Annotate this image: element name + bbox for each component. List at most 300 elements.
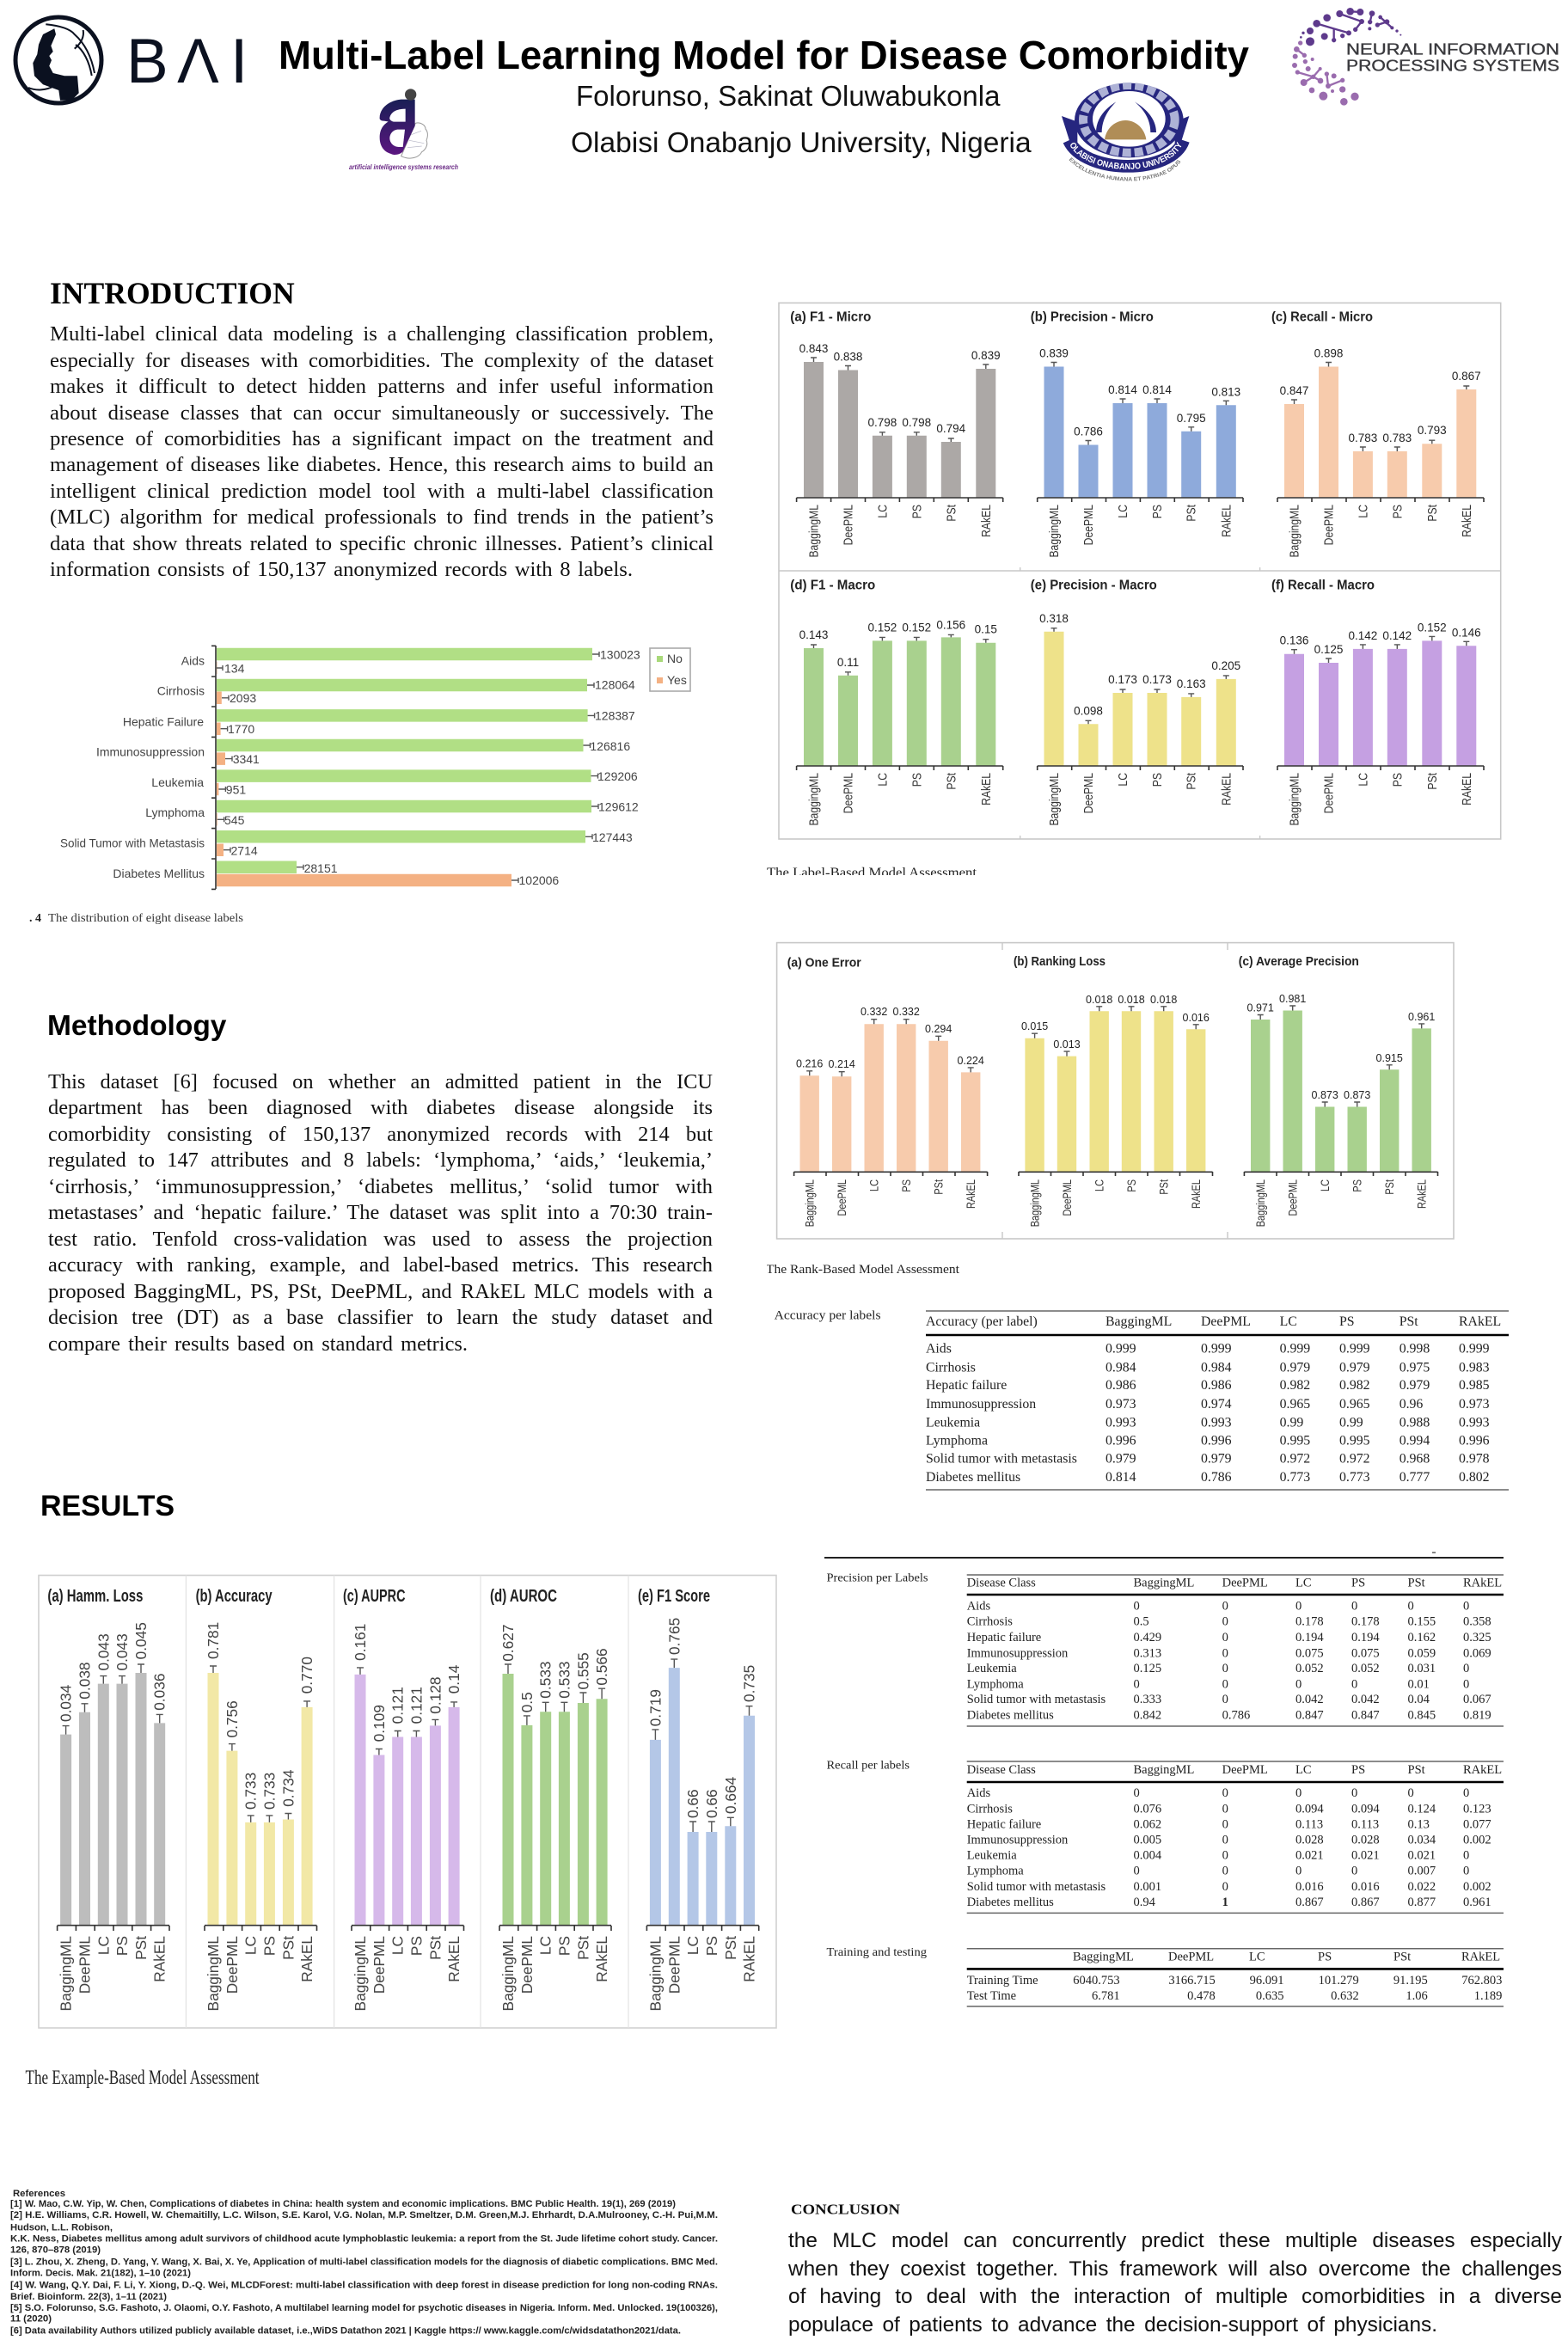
table: precision per labels: 0.5 [1133, 1614, 1149, 1628]
text: conclusion paragraph [788, 2229, 1562, 2337]
table: training and testing: LC [1249, 1951, 1265, 1964]
chart: distribution of eight disease labels: 102006 [519, 873, 559, 887]
table: recall per labels: LC [1295, 1763, 1312, 1777]
chart: F1 micro: (a) F1 - Micro [790, 309, 871, 325]
table: precision per labels: 0.075 [1351, 1647, 1380, 1661]
chart: one error: 0.216 [796, 1057, 823, 1069]
chart: F1 score: PS [703, 1936, 720, 1956]
table: precision per labels: 0.325 [1463, 1631, 1491, 1645]
chart: ranking loss: 0.018 [1086, 994, 1112, 1006]
table: recall per labels: Solid tumor with metastasis [967, 1880, 1106, 1894]
chart: ranking loss: (b) Ranking Loss [1014, 955, 1106, 969]
author name: Folorunso, Sakinat Oluwabukonla [576, 80, 1000, 112]
table: precision per labels: 0.786 [1222, 1708, 1250, 1722]
table: recall per labels: 0 [1295, 1786, 1302, 1800]
chart: ranking loss: 0.013 [1053, 1038, 1081, 1050]
table: training and testing: 0.635 [1256, 1989, 1284, 2003]
table: recall per labels: 0 [1222, 1834, 1228, 1847]
chart: distribution of eight disease labels: 129206 [597, 769, 638, 783]
table: precision per labels: 0.358 [1463, 1614, 1491, 1628]
table: recall per labels: 0.13 [1408, 1817, 1430, 1831]
chart: distribution of eight disease labels [60, 645, 691, 891]
table: precision per labels: 0.845 [1408, 1708, 1436, 1722]
table: recall per labels: 0 [1133, 1786, 1140, 1800]
chart: AUPRC: 0.109 [371, 1705, 388, 1742]
chart: recall macro: RAkEL [1460, 773, 1473, 805]
table: recall per labels: 0 [1351, 1786, 1357, 1800]
chart: F1 micro: 0.798 [902, 416, 931, 429]
chart: average precision: 0.981 [1279, 993, 1306, 1005]
text: introduction paragraph: intelligent clinical prediction model tool with a multi-label classification [50, 480, 714, 503]
chart: ranking loss: RAkEL [1190, 1179, 1204, 1209]
chart: recall micro: 0.867 [1452, 370, 1481, 383]
table: accuracy per labels: Diabetes mellitus [926, 1470, 1020, 1485]
table: recall per labels: 0.002 [1463, 1834, 1491, 1847]
table: recall per labels: 0.076 [1133, 1802, 1161, 1816]
table: accuracy per labels: 0.996 [1459, 1433, 1490, 1448]
chart: accuracy: PS [260, 1936, 278, 1956]
references: 11 (2020) [10, 2313, 52, 2324]
table: accuracy per labels [774, 1309, 1509, 1491]
chart: precision micro: PS [1150, 505, 1164, 518]
table: recall per labels: 0 [1222, 1880, 1228, 1894]
chart: distribution of eight disease labels: 128387 [595, 708, 635, 722]
chart: average precision: RAkEL [1415, 1179, 1429, 1209]
table: precision per labels: Aids [967, 1600, 990, 1614]
chart: average precision: 0.915 [1376, 1052, 1403, 1064]
table: accuracy per labels: RAkEL [1459, 1314, 1501, 1329]
chart: average precision [1239, 955, 1437, 1227]
table: training and testing: 1.189 [1474, 1989, 1502, 2003]
chart: F1 macro: DeePML [842, 773, 855, 813]
table: accuracy per labels: 0.999 [1339, 1341, 1370, 1357]
chart: AUROC: 0.533 [555, 1661, 573, 1699]
chart: ranking loss: 0.018 [1150, 994, 1177, 1006]
chart: one error [787, 956, 988, 1227]
table: accuracy per labels: 0.994 [1400, 1433, 1430, 1448]
table: precision per labels: 0 [1222, 1662, 1228, 1675]
table: precision per labels: Lymphoma [967, 1677, 1024, 1691]
chart: F1 score: 0.735 [741, 1665, 758, 1702]
table: accuracy per labels: 0.993 [1459, 1415, 1490, 1430]
table: precision per labels: 0 [1463, 1662, 1469, 1675]
chart: distribution of eight disease labels: 2093 [230, 691, 256, 705]
table: accuracy per labels: 0.982 [1280, 1378, 1310, 1393]
chart: F1 score: (e) F1 Score [638, 1587, 710, 1606]
chart: ranking loss: BaggingML [1028, 1179, 1042, 1227]
table: precision per labels: 0.042 [1295, 1693, 1324, 1706]
chart: F1 macro: LC [875, 773, 890, 787]
table: accuracy per labels: 0.99 [1280, 1415, 1303, 1430]
table: recall per labels: 0.113 [1295, 1817, 1323, 1831]
chart: F1 score: 0.765 [665, 1618, 683, 1655]
chart: precision micro: 0.839 [1039, 347, 1069, 359]
chart: one error: 0.224 [958, 1055, 984, 1067]
chart: distribution of eight disease labels: 545 [224, 813, 245, 827]
chart: accuracy: 0.734 [279, 1769, 297, 1807]
chart: precision micro: PSt [1185, 505, 1198, 522]
table: accuracy per labels: 0.996 [1106, 1433, 1136, 1448]
table: recall per labels: 0 [1222, 1802, 1228, 1816]
text: introduction paragraph: presence of comorbidities has a significant impact on the treatment and [50, 427, 714, 450]
chart: AUPRC: 0.161 [352, 1624, 369, 1661]
table: training and testing: Training and testing [827, 1945, 927, 1958]
chart: recall macro: (f) Recall - Macro [1271, 578, 1375, 592]
table: accuracy per labels: 0.986 [1201, 1378, 1232, 1393]
chart: recall micro: 0.793 [1418, 424, 1447, 437]
table: recall per labels: 0.124 [1408, 1802, 1436, 1816]
chart: F1 micro: 0.794 [936, 422, 966, 435]
table: recall per labels: PS [1351, 1763, 1365, 1777]
chart: average precision: BaggingML [1254, 1179, 1268, 1227]
references: [6] Data availability Authors utilized publicly available dataset, i.e.,WiDS Datathon 2021 | Kaggle https:// www.kaggle.com/c/widsdatathon2021/data. [10, 2326, 681, 2337]
text: methodology paragraph: accuracy with ranking, example, and label-based metrics. This research [48, 1253, 713, 1277]
chart: precision macro: 0.173 [1142, 673, 1172, 686]
table: precision per labels: LC [1295, 1577, 1312, 1590]
table: accuracy per labels: 0.773 [1339, 1470, 1370, 1485]
chart: recall micro: DeePML [1322, 505, 1336, 545]
table: training and testing: 96.091 [1250, 1974, 1284, 1988]
chart: precision micro: 0.814 [1142, 383, 1172, 396]
table: recall per labels: 0.016 [1295, 1880, 1324, 1894]
chart: accuracy: BaggingML [205, 1936, 222, 2011]
text: introduction paragraph: especially for diseases with comorbidities. The complexity of the dataset [50, 349, 714, 372]
text: introduction paragraph: (MLC) algorithm for medical professionals to find trends in the patient’s [50, 505, 714, 529]
table: accuracy per labels: PS [1339, 1314, 1355, 1329]
table: recall per labels: 0.001 [1133, 1880, 1161, 1894]
chart: AUPRC: 0.121 [389, 1687, 407, 1724]
text: introduction paragraph: data that show threats related to specific chronic illnesses. Patient’s clinical [50, 532, 714, 555]
table: recall per labels: 0.94 [1133, 1896, 1156, 1909]
chart: F1 micro: DeePML [842, 505, 855, 545]
chart: ranking loss: LC [1093, 1179, 1106, 1191]
table: recall per labels: 0 [1295, 1864, 1302, 1877]
chart: recall macro: PSt [1425, 773, 1439, 790]
table: recall per labels: 0.094 [1295, 1802, 1324, 1816]
table: precision per labels: 0.125 [1133, 1662, 1161, 1675]
text: introduction paragraph: makes it difficult to detect hidden patterns and infer useful information [50, 375, 714, 398]
chart: ranking loss: DeePML [1061, 1179, 1074, 1216]
chart: F1 micro [790, 309, 1003, 558]
chart: precision macro: LC [1116, 773, 1130, 787]
table: training and testing: 0.478 [1187, 1989, 1216, 2003]
chart: hamming loss: 0.043 [95, 1633, 112, 1671]
chart: distribution of eight disease labels: Immunosuppression [96, 744, 205, 758]
chart: precision micro: BaggingML [1047, 505, 1061, 558]
chart: ranking loss: 0.018 [1118, 994, 1145, 1006]
chart: AUROC: 0.627 [499, 1625, 517, 1662]
chart: recall macro: DeePML [1322, 773, 1336, 813]
chart: AUROC: 0.5 [518, 1692, 536, 1712]
chart: average precision: 0.971 [1247, 1002, 1274, 1014]
table: accuracy per labels: 0.988 [1400, 1415, 1430, 1430]
heading: introduction: INTRODUCTION [50, 276, 295, 310]
text: introduction paragraph: Multi-label clinical data modeling is a challenging classification problem, [50, 322, 714, 346]
table: precision per labels: 0 [1222, 1600, 1228, 1614]
table: accuracy per labels: 0.965 [1280, 1397, 1310, 1412]
table: precision per labels: 0 [1463, 1600, 1469, 1614]
table: precision per labels: Diabetes mellitus [967, 1708, 1054, 1722]
chart: F1 macro: 0.11 [837, 656, 859, 669]
table: accuracy per labels: 0.982 [1339, 1378, 1370, 1393]
chart: distribution of eight disease labels: 129612 [598, 800, 639, 814]
chart: F1 score: 0.66 [703, 1789, 720, 1818]
table: accuracy per labels: 0.96 [1400, 1397, 1423, 1412]
chart: recall macro: 0.146 [1452, 626, 1481, 639]
chart: precision micro: RAkEL [1219, 505, 1234, 537]
chart: recall macro: 0.142 [1382, 629, 1412, 642]
chart: hamming loss: PSt [132, 1936, 150, 1960]
text: methodology paragraph: ‘cirrhosis,’ ‘immunosuppression,’ ‘diabetes mellitus,’ ‘solid tumor with [48, 1175, 713, 1198]
chart: recall micro: 0.898 [1314, 347, 1343, 359]
text: introduction paragraph [50, 322, 714, 581]
table: recall per labels: 0 [1408, 1786, 1414, 1800]
chart: average precision: 0.873 [1344, 1089, 1370, 1101]
table: precision per labels: Immunosuppression [967, 1647, 1069, 1661]
chart: AUROC [490, 1587, 611, 2011]
chart: average precision: PS [1351, 1179, 1364, 1192]
table: precision per labels: 0 [1222, 1614, 1228, 1628]
table: accuracy per labels: 0.972 [1280, 1452, 1310, 1467]
table: recall per labels: 0.877 [1408, 1896, 1436, 1909]
table: precision per labels: Disease Class [967, 1577, 1036, 1590]
table: precision per labels: 0.333 [1133, 1693, 1161, 1706]
chart: F1 macro: PS [910, 773, 924, 787]
table: accuracy per labels: 0.802 [1459, 1470, 1490, 1485]
table: accuracy per labels: 0.993 [1201, 1415, 1232, 1430]
table: accuracy per labels: 0.979 [1339, 1360, 1370, 1375]
table: training and testing: BaggingML [1073, 1951, 1134, 1964]
table: accuracy per labels: 0.968 [1400, 1452, 1430, 1467]
chart: AUPRC: 0.14 [445, 1664, 462, 1694]
references [10, 2189, 718, 2337]
chart: recall macro: 0.136 [1280, 634, 1308, 647]
rule above precision table [824, 1552, 1504, 1559]
chart: accuracy: 0.733 [242, 1773, 260, 1810]
table: precision per labels: BaggingML [1133, 1577, 1194, 1590]
table: training and testing: PS [1318, 1951, 1332, 1964]
table: accuracy per labels: 0.978 [1459, 1452, 1490, 1467]
chart: precision micro: 0.786 [1074, 425, 1103, 438]
logo: Olabisi Onabanjo University crest [1062, 83, 1190, 181]
text: conclusion paragraph: the MLC model can concurrently predict these multiple diseases especially [788, 2229, 1562, 2252]
chart: F1 macro: 0.15 [975, 623, 997, 636]
table: accuracy per labels: 0.965 [1339, 1397, 1370, 1412]
heading: methodology: Methodology [47, 1010, 226, 1042]
table: recall per labels: 0.077 [1463, 1817, 1491, 1831]
caption: rank-based model assessment: The Rank-Based Model Assessment [767, 1263, 960, 1277]
table: precision per labels: 0.059 [1408, 1647, 1436, 1661]
chart: hamming loss [47, 1587, 169, 2011]
table: recall per labels: PSt [1408, 1763, 1425, 1777]
chart: distribution of eight disease labels: 951 [226, 783, 246, 797]
table: recall per labels: 0.016 [1351, 1880, 1380, 1894]
table: precision per labels: 0.842 [1133, 1708, 1161, 1722]
logo: Neural Information Processing Systems [1292, 8, 1559, 106]
table: accuracy per labels: DeePML [1201, 1314, 1251, 1329]
table: accuracy per labels: 0.998 [1400, 1341, 1430, 1357]
legend [650, 648, 690, 691]
references: [5] S.O. Folorunso, S.G. Fashoto, J. Olaomi, O.Y. Fashoto, A multilabel learning model for psychotic diseases in Nigeria. Inform. Med. Unlocked. 19(100326), [10, 2303, 718, 2313]
panel: introduction [50, 276, 714, 581]
chart: precision macro: 0.173 [1108, 673, 1137, 686]
chart: accuracy: PSt [279, 1936, 297, 1960]
table: accuracy per labels: Lymphoma [926, 1433, 988, 1448]
chart: F1 macro: (d) F1 - Macro [790, 578, 875, 592]
references: [3] L. Zhou, X. Zheng, D. Yang, Y. Wang, X. Bai, X. Ye, Application of multi-label classification models for the diagnosis of diabetic complications. BMC Med. [10, 2257, 718, 2268]
table: accuracy per labels: 0.983 [1459, 1360, 1490, 1375]
table: recall per labels: 0.005 [1133, 1834, 1161, 1847]
table: precision per labels: 0.313 [1133, 1647, 1161, 1661]
chart: hamming loss: 0.034 [58, 1684, 75, 1722]
table: recall per labels: 0 [1222, 1849, 1228, 1863]
chart: AUROC: LC [537, 1936, 554, 1955]
bars: No [217, 654, 592, 867]
table: training and testing: RAkEL [1461, 1951, 1500, 1964]
chart: precision micro: 0.795 [1177, 412, 1206, 425]
chart: distribution of eight disease labels: Leukemia [151, 775, 204, 789]
table: recall per labels: DeePML [1222, 1763, 1268, 1777]
table: precision per labels: PSt [1408, 1577, 1425, 1590]
text: conclusion paragraph: of having to deal with the interaction of multiple comorbidities in a diverse [788, 2285, 1562, 2308]
chart: F1 macro: 0.143 [799, 628, 828, 641]
chart: F1 macro: BaggingML [807, 773, 821, 826]
chart: accuracy: LC [242, 1936, 260, 1955]
chart: F1 macro: 0.152 [868, 621, 897, 634]
table: accuracy per labels: 0.996 [1201, 1433, 1232, 1448]
chart: one error: 0.214 [829, 1058, 855, 1070]
chart: AUPRC: PS [407, 1936, 425, 1956]
chart: one error: 0.332 [893, 1006, 920, 1018]
references: K.K. Ness, Diabetes mellitus among adult survivors of childhood acute lymphoblastic leukemia: a report from the St. Jude lifetime cohort study. Cancer. [10, 2233, 718, 2244]
table: training and testing: 1.06 [1406, 1989, 1428, 2003]
chart: hamming loss: DeePML [76, 1936, 93, 1994]
table: accuracy per labels: 0.984 [1106, 1360, 1136, 1375]
chart: distribution of eight disease labels: 3341 [233, 752, 260, 766]
text: methodology paragraph: proposed BaggingML, PS, PSt, DeePML, and RAkEL MLC models with a [48, 1280, 713, 1303]
chart: precision micro: 0.814 [1108, 383, 1137, 396]
table: recall per labels: 0 [1463, 1864, 1469, 1877]
chart: ranking loss [1014, 955, 1212, 1227]
chart: F1 score: LC [684, 1936, 701, 1955]
chart: recall micro [1271, 309, 1484, 558]
table: accuracy per labels: 0.999 [1106, 1341, 1136, 1357]
chart: recall micro: 0.783 [1349, 432, 1377, 444]
table: precision per labels: 0.178 [1295, 1614, 1324, 1628]
chart: distribution of eight disease labels: Diabetes Mellitus [113, 867, 205, 880]
text: conclusion paragraph: populace of patients to advance the decision-support of physicians. [788, 2313, 1437, 2337]
table: accuracy per labels: 0.993 [1106, 1415, 1136, 1430]
text: introduction paragraph: management of diseases like diabetes. Hence, this research aims to build an [50, 453, 714, 476]
chart: precision macro: BaggingML [1047, 773, 1061, 826]
chart: precision macro: 0.098 [1074, 704, 1103, 717]
table: recall per labels [827, 1758, 1504, 1914]
chart: AUROC: 0.555 [574, 1652, 591, 1690]
table: precision per labels: 0.178 [1351, 1614, 1380, 1628]
text: methodology paragraph: decision tree (DT) as a base classifier to learn the study dataset and [48, 1306, 713, 1329]
chart: one error: 0.332 [861, 1006, 887, 1018]
chart: recall macro: 0.125 [1314, 643, 1343, 656]
chart: precision macro: (e) Precision - Macro [1031, 578, 1157, 592]
legend: Yes [667, 673, 687, 687]
table: precision per labels: DeePML [1222, 1577, 1268, 1590]
chart: accuracy: 0.733 [260, 1773, 278, 1810]
chart: precision macro: 0.205 [1211, 659, 1240, 672]
chart: accuracy: 0.781 [205, 1622, 222, 1659]
table: recall per labels: 0.002 [1463, 1880, 1491, 1894]
table: training and testing: 762.803 [1461, 1974, 1502, 1988]
chart: distribution of eight disease labels: Hepatic Failure [123, 715, 204, 729]
table: precision per labels: Hepatic failure [967, 1631, 1041, 1645]
table: accuracy per labels: 0.99 [1339, 1415, 1363, 1430]
table: accuracy per labels: Aids [926, 1341, 952, 1357]
table: recall per labels: 0 [1463, 1849, 1469, 1863]
text: introduction paragraph: information consists of 150,137 anonymized records with 8 labels. [50, 558, 633, 581]
chart: AUROC: DeePML [518, 1936, 536, 1994]
table: training and testing: DeePML [1168, 1951, 1214, 1964]
chart: AUROC: BaggingML [499, 1936, 517, 2011]
table: precision per labels: Cirrhosis [967, 1614, 1013, 1628]
chart: recall micro: 0.783 [1382, 432, 1412, 444]
chart: AUPRC: RAkEL [445, 1936, 462, 1982]
table: precision per labels: 0.429 [1133, 1631, 1161, 1645]
bars: Yes [217, 668, 511, 880]
table: recall per labels: 0.867 [1295, 1896, 1324, 1909]
chart: F1 micro: LC [875, 505, 890, 518]
text: introduction paragraph: about disease classes that can occur simultaneously or successively. The [50, 401, 714, 425]
table: recall per labels: 0.007 [1408, 1864, 1436, 1877]
chart: accuracy: (b) Accuracy [196, 1587, 273, 1606]
table: accuracy per labels: 0.995 [1339, 1433, 1370, 1448]
table: recall per labels: 0.034 [1408, 1834, 1436, 1847]
chart: distribution of eight disease labels: 130023 [600, 648, 640, 662]
chart: AUPRC: (c) AUPRC [343, 1587, 406, 1606]
chart: hamming loss: RAkEL [151, 1936, 168, 1982]
chart: distribution of eight disease labels: Lymphoma [145, 805, 205, 819]
table: precision per labels: 0 [1351, 1600, 1357, 1614]
references: 126, 870–878 (2019) [10, 2245, 101, 2256]
table: training and testing: 0.632 [1331, 1989, 1359, 2003]
chart: ranking loss: PSt [1157, 1179, 1171, 1195]
table: precision per labels: 0 [1133, 1677, 1140, 1691]
chart: F1 macro: RAkEL [979, 773, 993, 805]
table: precision per labels: 0.847 [1351, 1708, 1380, 1722]
chart: one error: DeePML [836, 1179, 849, 1216]
chart: recall macro: LC [1356, 773, 1370, 787]
table: recall per labels: 0.021 [1295, 1849, 1324, 1863]
heading: results: RESULTS [40, 1490, 175, 1522]
chart: recall macro: 0.142 [1349, 629, 1377, 642]
chart: AUPRC: BaggingML [352, 1936, 369, 2011]
table: recall per labels: 0 [1133, 1864, 1140, 1877]
table: recall per labels: 0.062 [1133, 1817, 1161, 1831]
chart: accuracy: 0.756 [224, 1700, 241, 1738]
chart: recall micro: PS [1390, 505, 1405, 518]
table: recall per labels: Cirrhosis [967, 1802, 1013, 1816]
table: accuracy per labels: 0.975 [1400, 1360, 1430, 1375]
table: precision per labels: 0.042 [1351, 1693, 1380, 1706]
table: training and testing: 6040.753 [1073, 1974, 1120, 1988]
chart: average precision: 0.961 [1408, 1011, 1435, 1023]
chart: precision micro: DeePML [1081, 505, 1095, 545]
table: recall per labels: 0.113 [1351, 1817, 1379, 1831]
chart: recall micro: RAkEL [1460, 505, 1473, 537]
chart: precision macro: RAkEL [1219, 773, 1234, 805]
logo: Neural Information Processing Systems: NEURAL INFORMATION [1346, 40, 1559, 58]
logo: BAI: BΛI [126, 27, 248, 96]
table: precision per labels: 0 [1133, 1600, 1140, 1614]
table: precision per labels: 0 [1463, 1677, 1469, 1691]
